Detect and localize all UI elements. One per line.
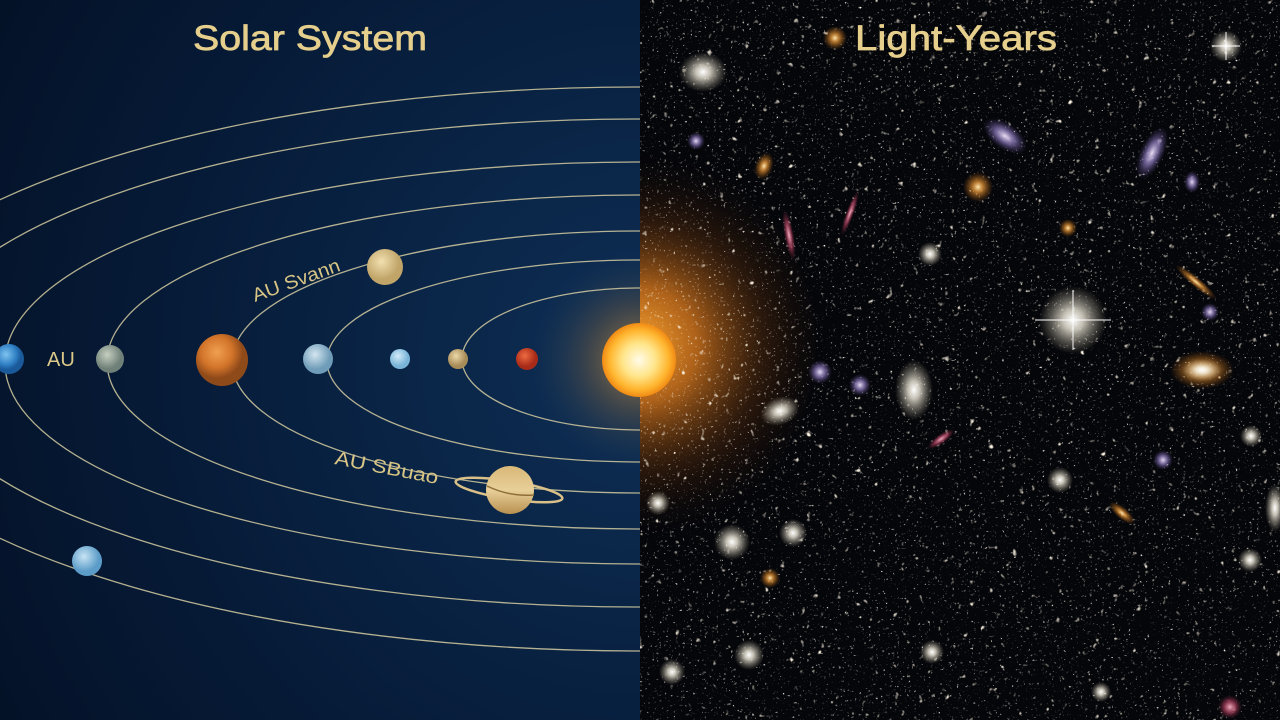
planet: ringed planet bbox=[454, 466, 564, 514]
planet: ice blue lower bbox=[72, 546, 102, 576]
panel: deep field bbox=[640, 0, 1280, 720]
orbit lines bbox=[0, 86, 640, 652]
label: AU: AU bbox=[47, 349, 75, 371]
galaxies and bright stars bbox=[646, 26, 1280, 719]
title: Solar System: Solar System bbox=[193, 19, 427, 58]
planet: beige bbox=[367, 249, 403, 285]
larger star speckle bbox=[640, 0, 1280, 720]
sun bbox=[602, 323, 676, 397]
fine star speckle bbox=[640, 0, 1280, 720]
planet: grey green bbox=[96, 345, 124, 373]
planet: light blue bbox=[390, 349, 410, 369]
panel: solar system bbox=[0, 0, 640, 720]
planet: pale blue bbox=[303, 344, 333, 374]
label: curved AU lower: AU SBuao bbox=[333, 448, 440, 489]
planet: blue far left bbox=[0, 344, 24, 374]
planet: orange bbox=[196, 334, 248, 386]
planet: red bbox=[516, 348, 538, 370]
title: Light-Years: Light-Years bbox=[855, 19, 1057, 58]
label: curved AU upper: AU Svann bbox=[250, 255, 343, 307]
planet: tan bbox=[448, 349, 468, 369]
orange glow bbox=[640, 181, 804, 508]
